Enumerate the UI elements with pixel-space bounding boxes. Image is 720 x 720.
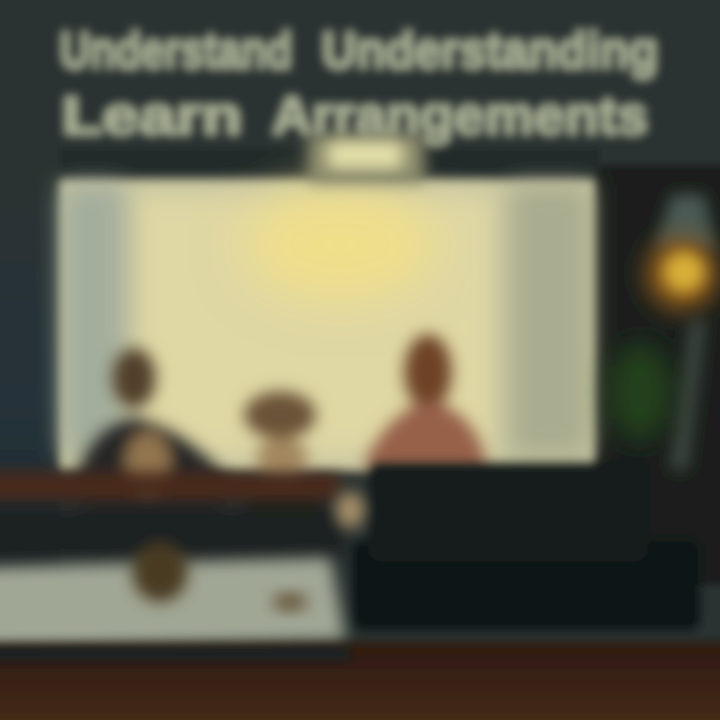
floor lamp	[646, 195, 718, 470]
lamp pole	[670, 320, 706, 470]
screen right pale edge	[510, 185, 590, 455]
sofa	[352, 462, 700, 630]
sofa back	[368, 462, 648, 562]
table shadow on floor	[0, 646, 350, 662]
lamp bulb glow	[646, 238, 718, 310]
floor	[0, 642, 720, 720]
child center	[244, 391, 323, 545]
ceiling light	[308, 134, 424, 184]
plant	[608, 344, 672, 440]
screen left pale edge	[62, 185, 124, 455]
person left	[78, 348, 228, 550]
title line 1 first word: Understand	[60, 22, 292, 80]
lower left dark zone	[0, 510, 345, 560]
table top	[0, 542, 345, 648]
screen warm center	[135, 195, 495, 455]
glow spot beside sofa	[336, 492, 364, 528]
title	[60, 22, 658, 146]
projection screen with glow	[60, 180, 594, 470]
item on table	[272, 592, 308, 612]
center light glow	[245, 190, 435, 300]
person right	[365, 334, 485, 470]
lamp shade	[655, 195, 716, 250]
wooden rail	[0, 472, 340, 500]
title line 2 second word: Arrangements	[272, 86, 648, 146]
center object	[132, 542, 188, 602]
title line 2 first word: Learn	[62, 86, 242, 146]
title line 1 second word: Understanding	[322, 22, 658, 80]
